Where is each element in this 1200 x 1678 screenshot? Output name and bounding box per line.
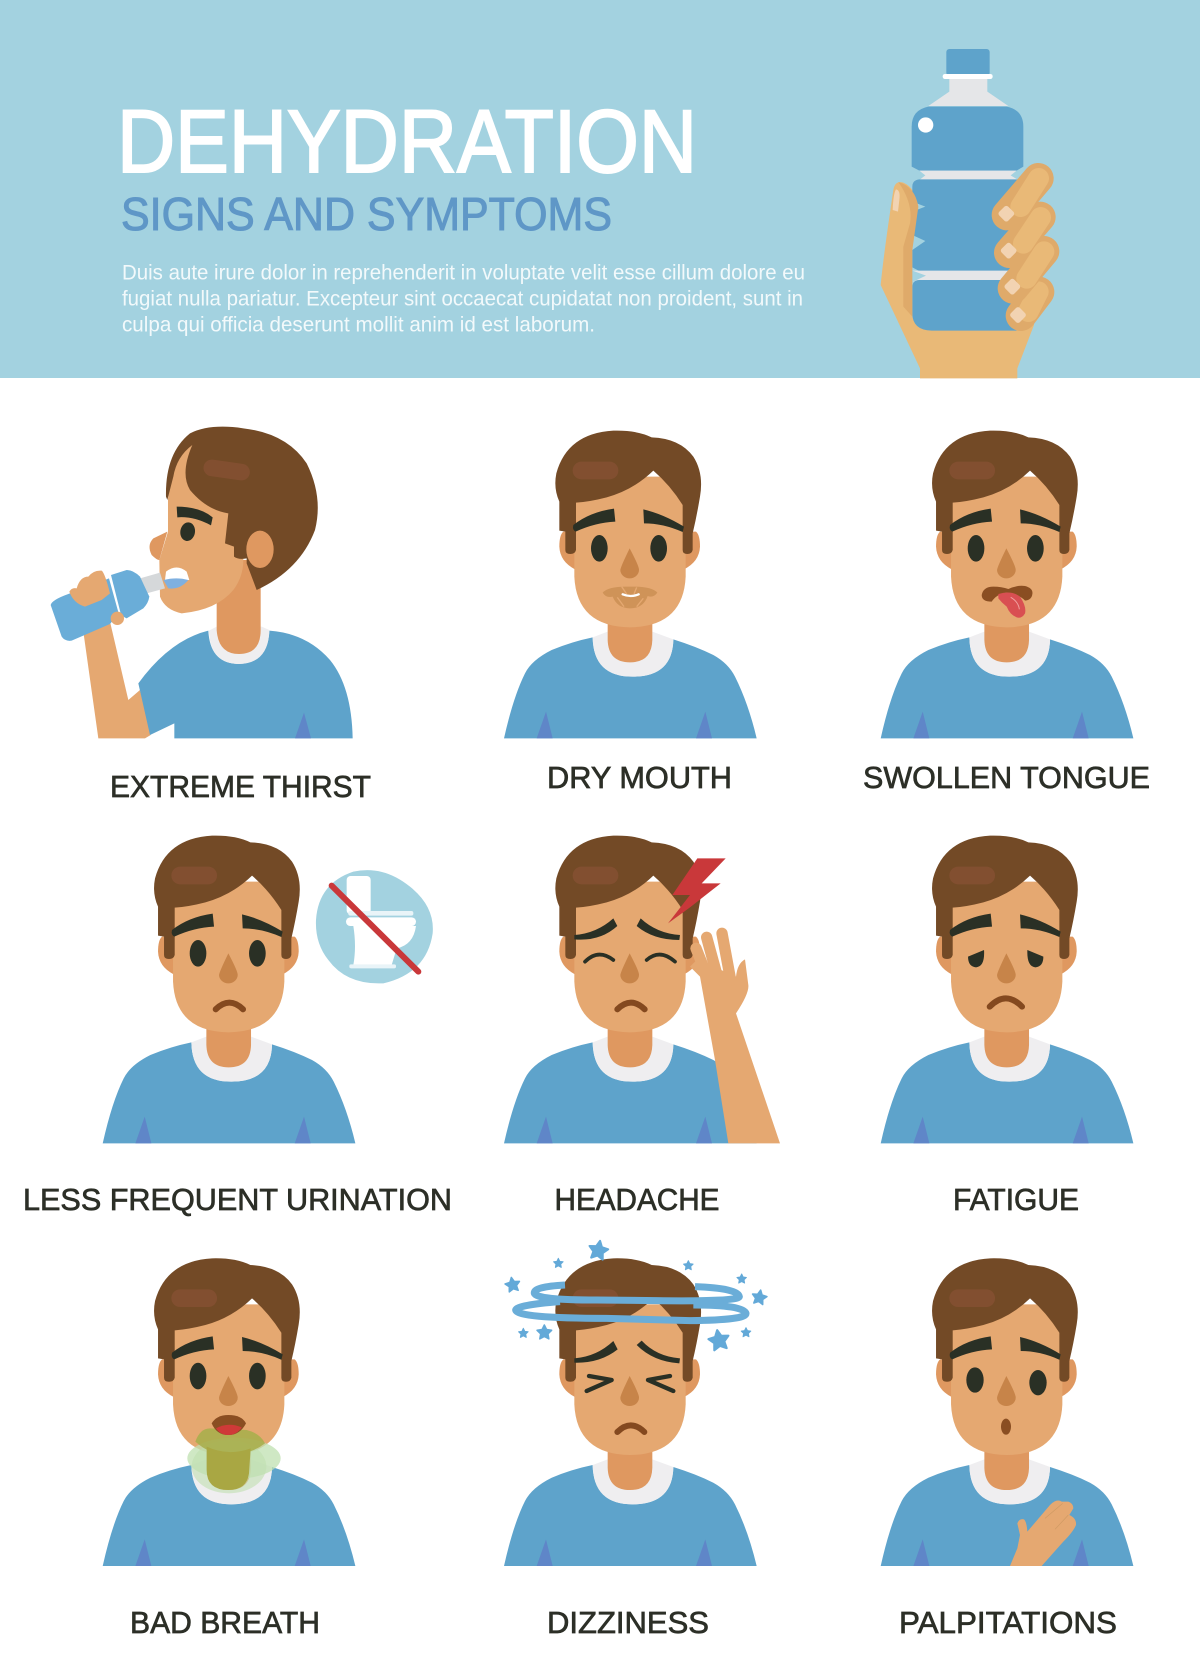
panel: dizziness — [504, 1239, 768, 1640]
label: BAD BREATH — [130, 1605, 320, 1640]
panel: swollen tongue — [863, 431, 1150, 795]
figure: man with cracked lips — [504, 431, 757, 738]
figure: man with headache — [504, 836, 780, 1143]
panel: bad breath — [103, 1258, 355, 1640]
label: PALPITATIONS — [899, 1605, 1117, 1640]
panel: fatigue — [881, 836, 1133, 1217]
label: HEADACHE — [554, 1182, 720, 1217]
panel: headache — [504, 836, 780, 1217]
subtitle: SIGNS AND SYMPTOMS — [121, 188, 612, 240]
figure: man with bad breath — [103, 1258, 355, 1566]
icon: no toilet — [316, 870, 433, 983]
figure: man drinking from bottle — [51, 427, 353, 738]
icon: hand holding water bottle — [881, 49, 1044, 378]
title: DEHYDRATION — [117, 91, 697, 191]
figure: tired man — [881, 836, 1133, 1143]
icon: swirl and stars — [504, 1239, 768, 1432]
label: EXTREME THIRST — [110, 769, 371, 804]
panel: extreme thirst — [51, 427, 371, 804]
panel: dry mouth — [504, 431, 757, 795]
intro text: culpa qui officia deserunt mollit anim id est laborum. — [122, 314, 595, 336]
figure: man with hand on chest — [881, 1258, 1133, 1566]
label: SWOLLEN TONGUE — [863, 760, 1150, 795]
panel: less frequent urination — [23, 836, 452, 1217]
label: FATIGUE — [953, 1182, 1079, 1217]
icon: green breath cloud — [187, 1415, 281, 1493]
panel: palpitations — [881, 1258, 1133, 1640]
panel: header banner — [0, 0, 1200, 378]
icon: face details and hand — [966, 1367, 1076, 1566]
intro text: fugiat nulla pariatur. Excepteur sint occaecat cupidatat non proident, sunt in — [122, 288, 803, 310]
intro text — [122, 262, 805, 336]
figure: sad man — [103, 836, 355, 1143]
label: DIZZINESS — [547, 1605, 709, 1640]
label: DRY MOUTH — [547, 760, 732, 795]
label: LESS FREQUENT URINATION — [23, 1182, 452, 1217]
intro text: Duis aute irure dolor in reprehenderit in voluptate velit esse cillum dolore eu — [122, 262, 805, 284]
figure: man with tongue out — [881, 431, 1133, 738]
figure: dizzy man — [504, 1258, 757, 1566]
